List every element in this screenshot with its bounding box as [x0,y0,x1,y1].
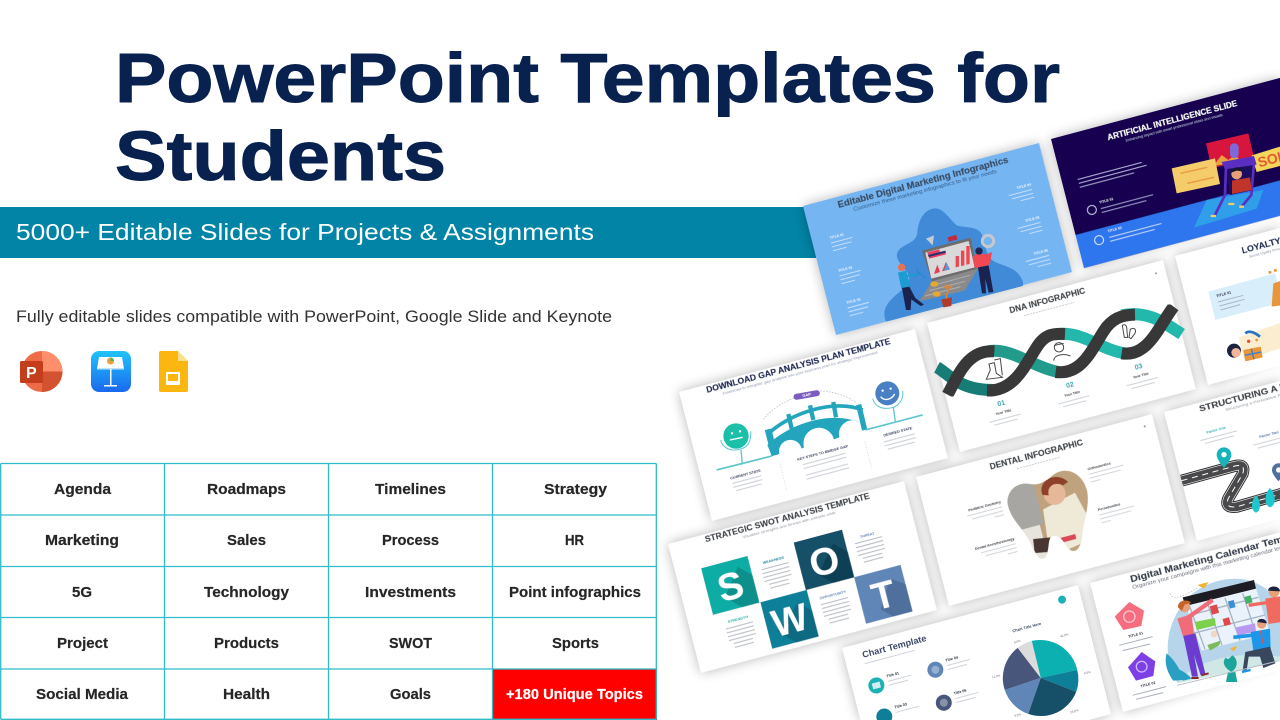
slide: digital marketing: TITLE 05 [1025,216,1040,223]
slide: artificial intelligence: Enhancing impact with smart professional slides and visuals [1125,113,1223,143]
topics table: Strategy [544,481,608,498]
topics table: Project [57,635,108,652]
icon: Google Slides [159,351,188,392]
compatibility text: Fully editable slides compatible with PowerPoint, Google Slide and Keynote [16,307,612,326]
illustration: robot and panels [1172,133,1280,228]
slide: gap analysis: KEY STEPS TO BRIDGE GAP [797,444,849,462]
topics table: Health [223,686,270,703]
topics table: Social Media [36,686,129,703]
icon: PowerPoint: P [26,365,37,382]
band text: 5000+ Editable Slides for Projects & Assignments [16,219,594,245]
topics table: HR [565,532,584,549]
slide: digital marketing [803,143,1072,335]
slide: DNA infographic: DNA INFOGRAPHIC [1009,286,1086,315]
slide: chart template: 5.0% [1014,639,1022,644]
photo in tooth shape [1007,470,1088,559]
slide: digital marketing: TITLE 03 [846,297,861,305]
slide: SWOT analysis [668,481,937,673]
slide: dental infographic: Orthodontics [1087,461,1111,471]
slide: digital marketing: Customize these marketing infographics to fit your needs [853,169,998,213]
slide: gap analysis: DESIRED STATE [883,426,913,438]
topics table: Agenda [54,481,112,498]
topics table: Sports [552,635,599,652]
topics table: Goals [390,686,431,703]
topics table [1,464,657,720]
illustration: winding road with pins [1182,447,1280,513]
SWOT squares [701,517,912,661]
slide: SWOT analysis: STRENGTH [727,615,749,624]
slide: gap analysis: Download to integrate gap analysis into your business plan for strategic improvement [722,350,879,396]
slide: artificial intelligence: TITLE 01 [1099,197,1114,205]
slide: SWOT analysis: WEAKNESS [762,556,785,565]
illustration: bridge over gap [717,381,923,491]
illustration: offers and gift: TITLE 01 [1216,290,1232,298]
slide: digital marketing: TITLE 01 [829,233,844,240]
illustration: offers and gift [1208,270,1280,361]
illustration: calendar team [1115,579,1280,699]
topics table: Timelines [375,481,446,498]
icon: Keynote [91,351,131,392]
topics table: Technology [204,584,290,601]
slide: chart template: 25.0% [1070,708,1079,714]
topics table: 5G [72,584,92,601]
icon: PowerPoint [20,351,62,392]
SWOT squares: T [867,573,900,620]
slide: digital marketing: Editable Digital Marketing Infographics [837,155,1010,211]
slide: DNA infographic: Your Title [1133,372,1149,380]
slide: structuring a persuasive presentation: Factor One [1206,426,1226,435]
SWOT squares: S [713,564,748,611]
title: Students [115,117,446,195]
slide: gap analysis [679,329,948,521]
slide: SWOT analysis: STRATEGIC SWOT ANALYSIS TEMPLATE [704,491,871,544]
slide: chart template: 9.0% [1014,712,1022,718]
slide: chart template: Title 06 [953,688,967,696]
slide: DNA infographic: 02 [1065,381,1075,390]
topics table: Products [214,635,279,652]
topics table: SWOT [389,635,432,652]
illustration: team around laptop [884,208,1023,322]
header band [0,207,816,258]
slide: digital marketing calendar [1090,520,1280,712]
slide: chart template: Chart Title Here [1012,621,1042,633]
slide: artificial intelligence: ARTIFICIAL INTELLIGENCE SLIDE [1106,99,1239,142]
illustration: bridge over gap: GAP [802,392,812,398]
slide: digital marketing: TITLE 02 [838,265,853,273]
slide: SWOT analysis: THREAT [859,531,876,539]
slide: DNA infographic [927,260,1196,452]
slide: dental infographic [916,414,1185,606]
topics table: Sales [227,532,266,549]
topics table: Point infographics [509,584,641,601]
slide: chart template: Chart Template [861,633,927,660]
slide: artificial intelligence: TITLE 02 [1107,226,1122,234]
slide: DNA infographic: Your Title [995,408,1012,416]
slide: gap analysis: CURRENT STATE [730,469,762,481]
slide: dental infographic: Periodontics [1098,502,1121,512]
illustration: DNA ribbon [937,307,1182,395]
slide: chart template: Title 04 [945,655,959,663]
slide: chart template: 11.0% [992,673,1001,679]
slide: structuring a persuasive presentation: Factor Two [1259,430,1280,439]
slide: structuring a persuasive presentation [1164,349,1280,541]
slide: chart template: 8.0% [1084,670,1091,676]
slide: chart template: Title 03 [894,702,907,710]
slide: dental infographic: DENTAL INFOGRAPHIC [989,438,1084,471]
slide: dental infographic: Dental Anesthesiology [975,537,1016,551]
slide: dental infographic: Pediatric Dentistry [968,500,1002,513]
slide: DNA infographic: 03 [1134,363,1144,372]
slide: digital marketing calendar: Organize your campaigns with this marketing calendar template [1132,541,1280,591]
slide: SWOT analysis: OPPORTUNITY [819,590,847,601]
slide: digital marketing: TITLE 04 [1016,183,1032,190]
slide: SWOT analysis: Visualize strengths and threats with editable slide [742,511,836,539]
SWOT squares: O [805,538,844,587]
SWOT squares: W [767,596,813,646]
slide: artificial intelligence [1051,76,1280,268]
slide: DNA infographic: 01 [997,400,1006,409]
pie chart [1003,640,1078,716]
topics table: Investments [365,584,456,601]
illustration: calendar team: TITLE 01 [1128,631,1144,639]
topics table: Roadmaps [207,481,286,498]
slide: loyalty [1175,193,1280,385]
title: PowerPoint Templates for [115,39,1060,117]
topics table: Process [382,532,439,549]
slide: gap analysis: DOWNLOAD GAP ANALYSIS PLAN TEMPLATE [705,337,892,395]
slide: digital marketing: TITLE 06 [1033,249,1048,256]
slide: loyalty: LOYALTY [1241,236,1280,255]
slide: chart template: 42.0% [1060,632,1069,638]
slide: chart template [842,585,1111,720]
illustration: calendar team: TITLE 02 [1140,681,1156,689]
slide: digital marketing calendar: Digital Marketing Calendar Template [1129,528,1280,584]
topics table: +180 Unique Topics [506,686,643,703]
title [115,39,1060,195]
topics table: Marketing [45,532,119,549]
slide: DNA infographic: Your Title [1064,390,1081,398]
slide: chart template: Title 01 [886,671,900,678]
